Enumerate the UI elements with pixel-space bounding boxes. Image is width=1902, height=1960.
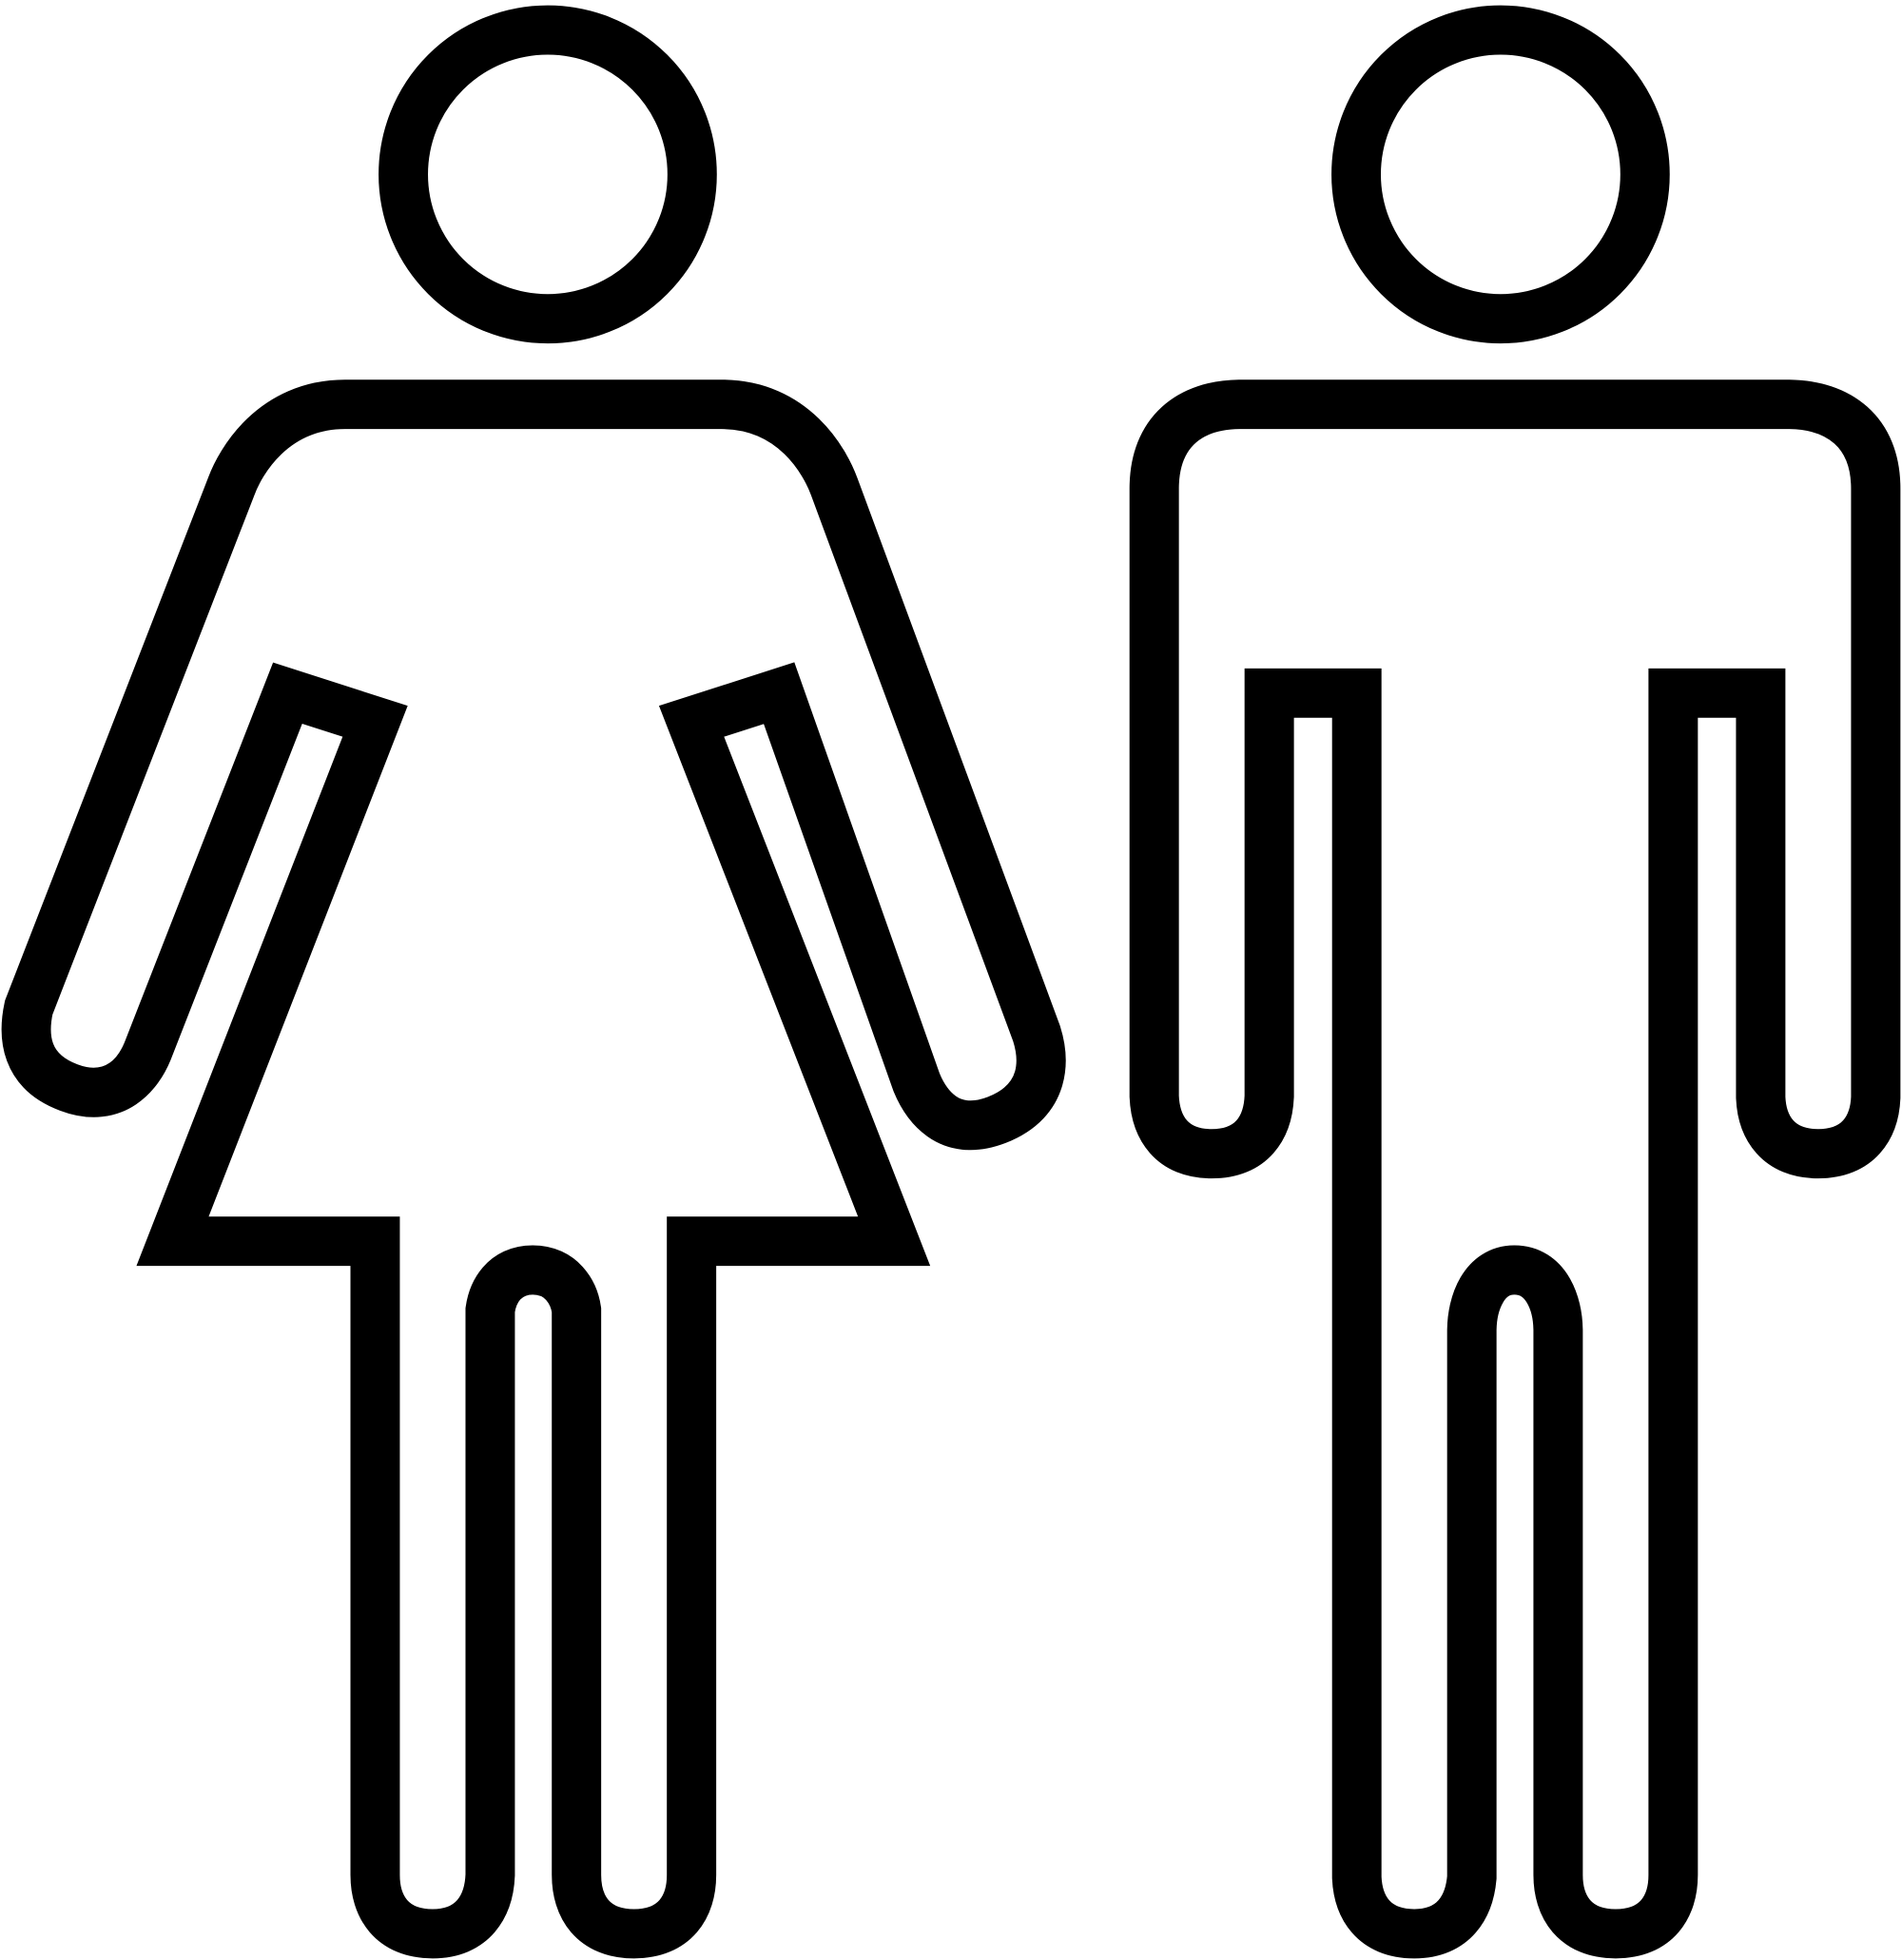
icon: woman figure (27, 30, 1041, 1933)
woman head (403, 30, 692, 319)
man body outline (1155, 404, 1875, 1933)
man head (1356, 30, 1645, 319)
woman body outline (27, 404, 1041, 1933)
icon: man figure (1155, 30, 1875, 1933)
